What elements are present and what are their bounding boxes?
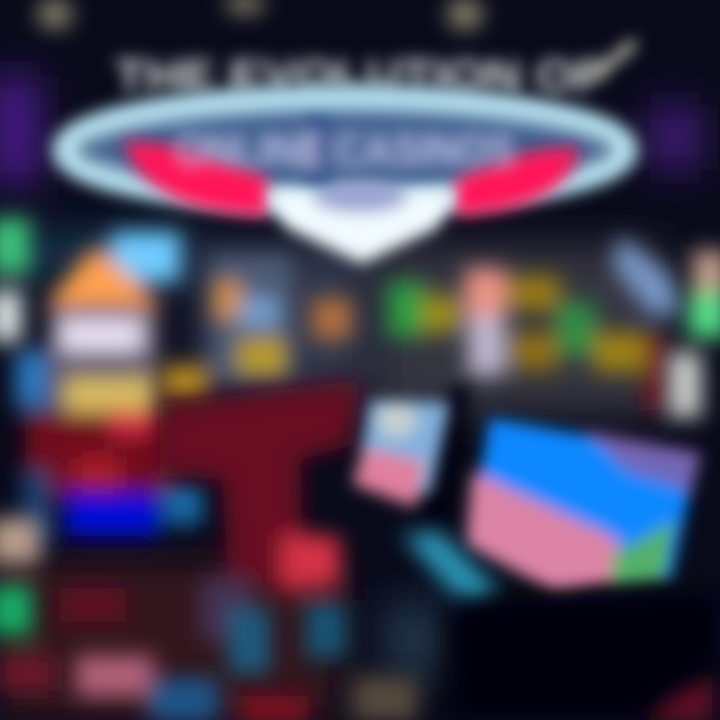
sign red banner left — [124, 142, 268, 216]
orange topper — [45, 245, 162, 305]
divider shadow — [418, 385, 470, 530]
sign chevron — [266, 181, 456, 264]
blue topper — [110, 232, 180, 282]
machine body — [48, 305, 160, 415]
centre slot machine — [162, 255, 352, 399]
large screen — [466, 418, 702, 592]
left edge props — [0, 218, 55, 691]
red highlights — [110, 410, 152, 434]
blue base — [65, 492, 160, 536]
white band — [60, 320, 142, 350]
title: the evolution of: THE EVOLUTION OF — [115, 50, 605, 102]
yellow band — [65, 378, 153, 412]
ceiling lights — [37, 0, 483, 30]
title: online casinos: ONLINE CASINOS — [175, 124, 515, 176]
small screen — [352, 400, 450, 508]
lower left floor items — [60, 588, 418, 720]
side blue — [15, 350, 47, 408]
dark foreground — [450, 590, 720, 720]
centre red cabinet — [160, 380, 360, 674]
left slot machine — [15, 232, 203, 545]
red cabinet — [25, 412, 170, 497]
sign inner panel — [80, 95, 610, 205]
right slot bank — [388, 235, 682, 410]
sign red banner right — [455, 148, 580, 216]
sign outer ring — [65, 98, 625, 202]
right edge props — [650, 250, 720, 720]
lower teal strip — [402, 530, 500, 610]
sign emblem — [65, 95, 625, 264]
